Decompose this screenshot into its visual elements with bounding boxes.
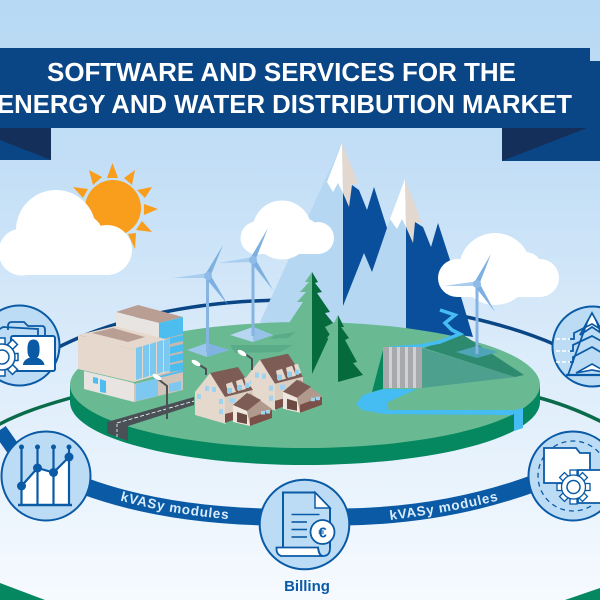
lake behind the dam	[372, 334, 524, 392]
tree: large	[289, 272, 333, 374]
office building	[78, 305, 183, 402]
island side	[70, 385, 540, 465]
cloud: right	[438, 233, 559, 305]
road	[107, 397, 194, 441]
icon: analytics chart	[2, 432, 90, 520]
label: kVASy modules left: kVASy modules	[120, 491, 228, 519]
houses	[195, 354, 322, 426]
mountains	[260, 143, 473, 375]
mountain light faces	[260, 143, 406, 375]
upper block	[116, 305, 183, 323]
euro symbol: €	[318, 524, 327, 542]
label: kVASy modules right: kVASy modules	[390, 494, 498, 520]
icon: customer portal	[0, 306, 60, 386]
tree: small	[322, 315, 363, 382]
wind turbine 2	[218, 228, 273, 342]
banner right fold	[502, 128, 600, 161]
icon: folders and gear	[528, 432, 600, 520]
title: SOFTWARE AND SERVICES FOR THE	[47, 59, 516, 87]
street lamps	[152, 349, 252, 419]
title	[0, 59, 572, 119]
island top	[70, 322, 540, 448]
mountain snow right	[390, 179, 406, 229]
mountain dark face left	[343, 185, 387, 306]
banner body	[0, 48, 600, 128]
shadows on the ground	[230, 332, 296, 353]
cloud: middle	[240, 200, 334, 260]
island	[70, 322, 540, 465]
ring: green middle arc	[0, 397, 600, 425]
banner	[0, 48, 600, 161]
bottom green ring corners	[0, 583, 600, 600]
icon: billing document	[260, 480, 349, 569]
lower block	[78, 326, 169, 350]
label: Billing: Billing	[284, 578, 330, 595]
river lower	[356, 389, 523, 431]
title: ENERGY AND WATER DISTRIBUTION MARKET	[0, 91, 572, 119]
mountain dark face right	[406, 222, 473, 345]
cloud: left	[0, 190, 132, 276]
dam	[383, 347, 422, 388]
person	[23, 340, 44, 365]
wind turbine 1	[173, 245, 229, 357]
river upper	[392, 310, 460, 348]
banner left fold	[0, 128, 51, 160]
dam wedge	[372, 350, 383, 392]
wind turbine 3	[444, 254, 498, 358]
ring: kVASy modules band	[0, 430, 535, 517]
icon: power pylon	[552, 306, 600, 386]
mountain snow left	[327, 143, 343, 193]
icon: sun	[73, 163, 158, 249]
ring: dark blue back arc	[55, 300, 556, 349]
river waterfall on island side	[514, 408, 523, 431]
